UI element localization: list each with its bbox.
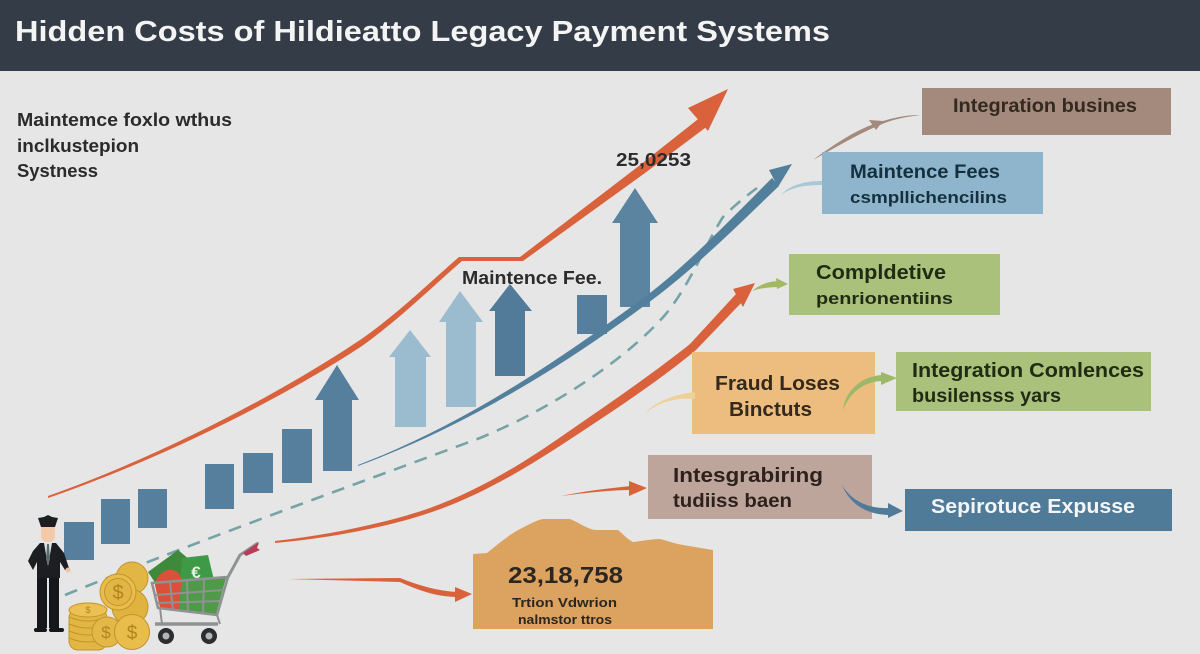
box: fraud losses: Fraud Loses bbox=[715, 373, 840, 395]
box: competitive: Compldetive bbox=[816, 262, 946, 284]
arrow to total panel bbox=[288, 578, 472, 602]
panel: total volume bbox=[473, 519, 713, 629]
box: fraud losses: Binctuts bbox=[729, 399, 812, 421]
lower red trend arrow bbox=[275, 283, 755, 543]
dashed trend line bbox=[65, 188, 757, 595]
box: integrating: tudiiss baen bbox=[673, 491, 792, 512]
box: fraud losses bbox=[692, 352, 875, 434]
intro text block: inclkustepion bbox=[17, 136, 139, 156]
intro text block: Maintemce foxlo wthus bbox=[17, 110, 232, 130]
connector to fraud box bbox=[645, 392, 695, 413]
box: integrating: Intesgrabiring bbox=[673, 465, 823, 487]
intro text block bbox=[17, 110, 232, 181]
icon: shopping cart: € bbox=[191, 563, 201, 582]
box: maintenance fees: csmpllichencilins bbox=[850, 188, 1007, 207]
chart label: Maintence Fee. bbox=[462, 268, 602, 288]
box: integration compliance: busilensss yars bbox=[912, 386, 1061, 407]
intro text block: Systness bbox=[17, 161, 98, 181]
box: integration business: Integration busines bbox=[953, 96, 1137, 117]
arrow integrating to service expense bbox=[842, 485, 903, 518]
icon: shopping cart bbox=[148, 542, 260, 644]
upper red trend arrow bbox=[48, 89, 728, 498]
panel: total volume: Trtion Vdwrion bbox=[512, 595, 617, 610]
box: integration business bbox=[922, 88, 1171, 135]
box: competitive: penrionentiins bbox=[816, 289, 953, 308]
title banner bbox=[0, 0, 1200, 71]
connector to integration box bbox=[813, 115, 920, 160]
box: integration compliance: Integration Comlences bbox=[912, 360, 1144, 382]
bar squares rising chart bbox=[64, 295, 607, 560]
box: service expense bbox=[905, 489, 1172, 531]
title banner: Hidden Costs of Hildieatto Legacy Payment Systems bbox=[15, 16, 830, 48]
upward block arrows bbox=[315, 188, 658, 471]
panel: total volume: nalmstor ttros bbox=[518, 612, 612, 627]
value label: 25,0253 bbox=[616, 150, 691, 170]
box: integrating bbox=[648, 455, 872, 519]
icon: gold coins bbox=[69, 562, 150, 650]
blue trend arrow bbox=[358, 164, 792, 466]
connector to competitive box bbox=[752, 278, 788, 291]
icon: gold coins: $ bbox=[112, 582, 124, 604]
arrow to integrating box bbox=[561, 481, 647, 496]
icon: gold coins: $ bbox=[101, 623, 111, 642]
box: integration compliance bbox=[896, 352, 1151, 411]
icon: businessman bbox=[28, 515, 70, 632]
icon: gold coins: $ bbox=[127, 623, 138, 644]
box: competitive bbox=[789, 254, 1000, 315]
box: maintenance fees bbox=[822, 152, 1043, 214]
box: maintenance fees: Maintence Fees bbox=[850, 162, 1000, 183]
connector to maintenance box bbox=[781, 181, 822, 195]
arrow fraud to integration bbox=[843, 372, 897, 410]
panel: total volume: 23,18,758 bbox=[508, 562, 623, 588]
box: service expense: Sepirotuce Expusse bbox=[931, 496, 1135, 518]
icon: gold coins: $ bbox=[85, 605, 91, 615]
